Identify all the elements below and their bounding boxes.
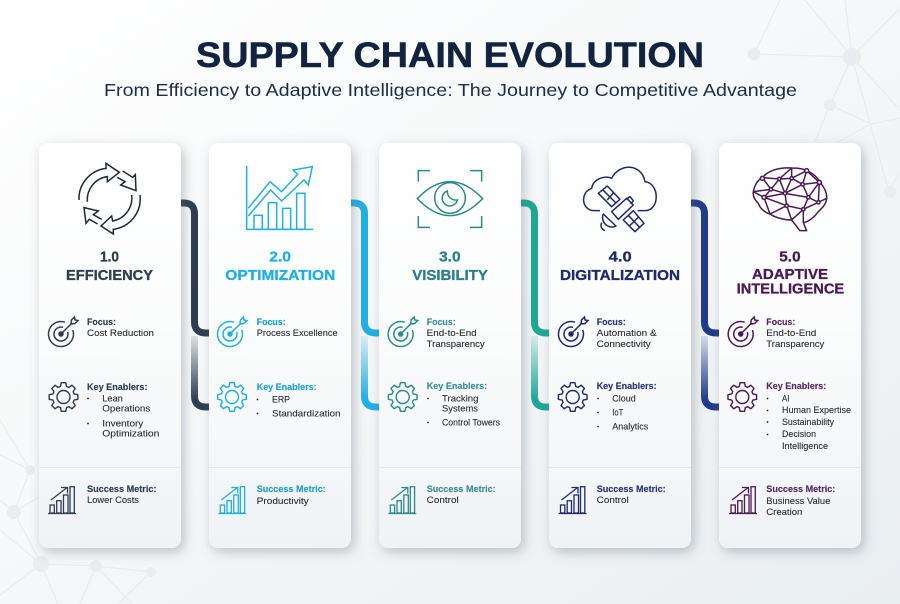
key enablers text: Key Enablers:	[597, 381, 657, 392]
focus text	[597, 317, 657, 350]
success metric text	[597, 484, 666, 506]
subtitle: From Efficiency to Adaptive Intelligence: The Journey to Competitive Advantage	[104, 80, 797, 100]
key enablers text: IoT	[612, 408, 623, 418]
key enablers text	[597, 381, 657, 432]
icon: growth chart	[247, 166, 313, 229]
icon: eye	[417, 171, 483, 227]
key enablers text: Human Expertise	[782, 405, 851, 416]
panel: 4.0 digitalization	[549, 143, 691, 548]
focus text: Transparency	[766, 339, 825, 350]
focus text: Process Excellence	[257, 328, 338, 339]
success metric text: Creation	[766, 507, 802, 518]
icon: target	[558, 317, 588, 347]
heading: 2.0 optimization: 2.0	[269, 250, 291, 266]
icon: gear	[558, 383, 587, 411]
key enablers text: Sustainability	[782, 417, 834, 428]
success metric text: Lower Costs	[87, 495, 139, 506]
focus text: Focus:	[766, 317, 795, 328]
icon: target	[48, 317, 78, 347]
key enablers text: Systems	[442, 404, 478, 414]
focus text	[766, 317, 825, 350]
heading: 3.0 visibility	[412, 250, 488, 284]
focus text: Connectivity	[597, 339, 651, 350]
icon: target	[388, 317, 418, 347]
success metric text	[427, 484, 496, 506]
key enablers text: Decision	[782, 429, 816, 440]
heading: 2.0 optimization	[225, 250, 335, 284]
focus text: Focus:	[87, 317, 116, 328]
key enablers text	[87, 382, 159, 440]
key enablers text: Tracking	[442, 394, 478, 404]
icon: bar chart	[388, 487, 416, 514]
heading: 5.0 adaptive intelligence: ADAPTIVE	[752, 267, 828, 283]
panel: 5.0 adaptive intelligence	[719, 143, 861, 548]
focus text: Cost Reduction	[87, 328, 154, 339]
icon: cloud and satellite	[584, 167, 656, 232]
arrow: connector 1 to 2	[178, 203, 212, 407]
icon: gear	[728, 383, 757, 411]
focus text: Focus:	[597, 317, 626, 328]
success metric text: Control	[427, 495, 459, 506]
focus text: End-to-End	[427, 328, 477, 339]
success metric text	[257, 484, 326, 507]
icon: target	[217, 317, 247, 347]
icon: gear	[388, 383, 417, 411]
success metric text: Success Metric:	[257, 484, 326, 495]
key enablers text: Key Enablers:	[87, 382, 148, 393]
heading: 5.0 adaptive intelligence	[737, 250, 845, 298]
success metric text: Success Metric:	[87, 484, 156, 495]
key enablers text	[427, 381, 500, 428]
heading: 1.0 efficiency	[66, 250, 153, 284]
heading: 1.0 efficiency: 1.0	[100, 250, 119, 266]
key enablers text: ERP	[272, 394, 290, 406]
arrow: connector 3 to 4	[518, 203, 552, 407]
panel: 2.0 optimization	[209, 143, 351, 548]
key enablers text: Key Enablers:	[427, 381, 487, 392]
heading: 1.0 efficiency: EFFICIENCY	[66, 268, 153, 284]
focus text: Automation &	[597, 328, 657, 339]
icon: bar chart	[729, 487, 757, 514]
key enablers text: Standardization	[272, 408, 340, 420]
success metric text: Success Metric:	[766, 484, 835, 495]
focus text	[427, 317, 485, 350]
success metric text: Business Value	[766, 496, 830, 507]
icon: target	[728, 317, 758, 347]
focus text: End-to-End	[766, 328, 816, 339]
focus text	[257, 317, 338, 339]
heading: 4.0 digitalization	[560, 250, 680, 284]
key enablers text: Cloud	[612, 394, 636, 404]
heading: 5.0 adaptive intelligence: 5.0	[779, 250, 801, 266]
key enablers text: Operations	[102, 404, 151, 414]
success metric text: Success Metric:	[597, 484, 666, 495]
icon: bar chart	[558, 487, 586, 514]
key enablers text	[257, 382, 340, 420]
focus text	[87, 317, 154, 339]
icon: neural brain	[753, 168, 827, 231]
success metric text: Control	[597, 495, 629, 506]
icon: gear	[49, 383, 78, 411]
key enablers text: Control Towers	[442, 418, 500, 428]
key enablers text: Analytics	[612, 422, 649, 432]
key enablers text	[766, 381, 851, 452]
focus text: Focus:	[427, 317, 456, 328]
title: SUPPLY CHAIN EVOLUTION	[196, 36, 704, 75]
key enablers text: Key Enablers:	[766, 381, 826, 392]
icon: gear	[218, 383, 246, 411]
icon: cycle arrows	[79, 163, 140, 234]
heading: 3.0 visibility: VISIBILITY	[412, 268, 488, 284]
key enablers text: Optimization	[102, 428, 159, 440]
icon: bar chart	[218, 487, 246, 514]
heading: 4.0 digitalization: 4.0	[609, 250, 632, 266]
icon: bar chart	[48, 487, 76, 514]
success metric text: Productivity	[257, 496, 309, 507]
heading: 4.0 digitalization: DIGITALIZATION	[560, 268, 680, 284]
key enablers text: Intelligence	[782, 441, 828, 452]
panel: 3.0 visibility	[379, 143, 521, 548]
panel: 1.0 efficiency	[39, 143, 181, 548]
arrow: connector 4 to 5	[688, 203, 722, 407]
key enablers text: Inventory	[102, 418, 144, 430]
heading: 3.0 visibility: 3.0	[439, 250, 461, 266]
focus text: Focus:	[257, 317, 286, 328]
key enablers text: Lean	[102, 394, 123, 404]
arrow: connector 2 to 3	[348, 203, 382, 407]
success metric text	[87, 484, 156, 506]
focus text: Transparency	[427, 339, 485, 350]
key enablers text: AI	[782, 394, 790, 404]
heading: 5.0 adaptive intelligence: INTELLIGENCE	[737, 282, 845, 298]
success metric text: Success Metric:	[427, 484, 496, 495]
key enablers text: Key Enablers:	[257, 382, 317, 393]
heading: 2.0 optimization: OPTIMIZATION	[225, 268, 335, 284]
success metric text	[766, 484, 835, 518]
